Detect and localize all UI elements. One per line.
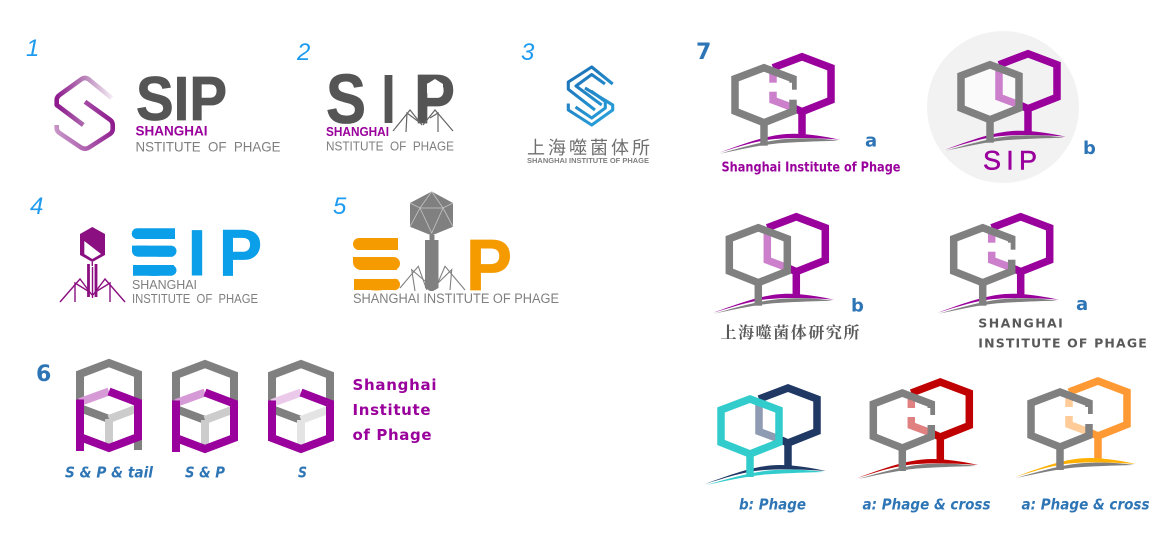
logo 4 <box>60 216 262 306</box>
text english name: SHANGHAI INSTITUTE OF PHAGE <box>527 156 649 165</box>
number 5: 5 <box>333 193 347 220</box>
text Chinese name: 上海噬菌体所 <box>527 138 650 158</box>
text english name two lines <box>978 316 1147 350</box>
label a: a <box>865 131 877 152</box>
logo row 2 b <box>713 217 834 314</box>
logo 3 <box>527 67 650 165</box>
label a: a <box>1076 294 1088 315</box>
icon: purple phage <box>60 227 125 302</box>
icon: phage legs <box>393 110 453 132</box>
caption b: Phage: b: Phage <box>739 496 806 514</box>
label b: b <box>1083 138 1096 159</box>
logo: S <box>272 364 330 449</box>
icon: gray phage <box>400 192 465 291</box>
wordmark P: P <box>219 216 262 290</box>
text SHANGHAI: SHANGHAI <box>132 277 197 292</box>
text english name two lines: INSTITUTE OF PHAGE <box>978 336 1147 350</box>
caption S: S <box>298 464 307 482</box>
logo variant: orange <box>1015 381 1136 478</box>
circle background <box>927 31 1079 183</box>
logo: S & P & tail <box>80 363 138 451</box>
text SHANGHAI: SHANGHAI <box>136 122 208 138</box>
logo variant: cyan navy <box>705 388 826 485</box>
number 6: 6 <box>36 362 51 387</box>
logo row 2 a <box>938 217 1059 314</box>
text Shanghai Institute of Phage: Shanghai <box>352 376 436 394</box>
icon: S hexagon <box>57 78 113 149</box>
text Shanghai Institute of Phage <box>352 376 436 444</box>
text SIP: SIP <box>983 146 1037 176</box>
text english name two lines: SHANGHAI <box>978 316 1063 330</box>
text Chinese full name: 上海噬菌体研究所 <box>720 320 860 343</box>
caption a: Phage & cross orange: a: Phage & cross <box>1022 496 1150 514</box>
number 7: 7 <box>696 40 711 65</box>
logo 7b in circle <box>927 31 1079 183</box>
text institute of phage: NSTITUTE OF PHAGE <box>136 138 280 154</box>
caption 7a: Shanghai Institute of Phage <box>722 160 901 176</box>
caption S & P: S & P <box>185 464 225 482</box>
wordmark I: I <box>381 60 396 138</box>
wordmark I: I <box>187 216 207 290</box>
text Shanghai Institute of Phage: of Phage <box>352 426 432 444</box>
logo 1 <box>57 65 281 154</box>
caption a: Phage & cross red: a: Phage & cross <box>862 496 991 514</box>
logo 7a <box>719 57 840 154</box>
wordmark SIP: SIP <box>136 65 227 134</box>
text institute of phage: NSTITUTE OF PHAGE <box>326 140 454 154</box>
text Shanghai Institute of Phage: Institute <box>352 401 430 419</box>
wordmark S: S <box>352 226 401 306</box>
number 4: 4 <box>30 193 43 220</box>
text SHANGHAI: SHANGHAI <box>326 125 389 139</box>
caption S & P & tail: S & P & tail <box>65 464 154 482</box>
number 3: 3 <box>521 39 535 66</box>
icon: blue double S <box>568 67 613 125</box>
label b: b <box>851 296 864 317</box>
logo: S & P <box>176 364 234 452</box>
text english name: SHANGHAI INSTITUTE OF PHAGE <box>353 291 559 306</box>
wordmark S: S <box>131 216 177 290</box>
logo variant: red <box>857 382 978 479</box>
wordmark P: P <box>414 60 455 138</box>
wordmark P: P <box>466 226 512 306</box>
group 6 logos <box>65 363 436 482</box>
wordmark S: S <box>326 60 366 138</box>
icon: phage head in P <box>427 79 443 97</box>
logo 2 <box>326 60 455 154</box>
logo 5 <box>348 192 559 306</box>
number 1: 1 <box>26 35 39 62</box>
number 2: 2 <box>296 39 310 66</box>
text institute of phage: INSTITUTE OF PHAGE <box>132 291 258 306</box>
